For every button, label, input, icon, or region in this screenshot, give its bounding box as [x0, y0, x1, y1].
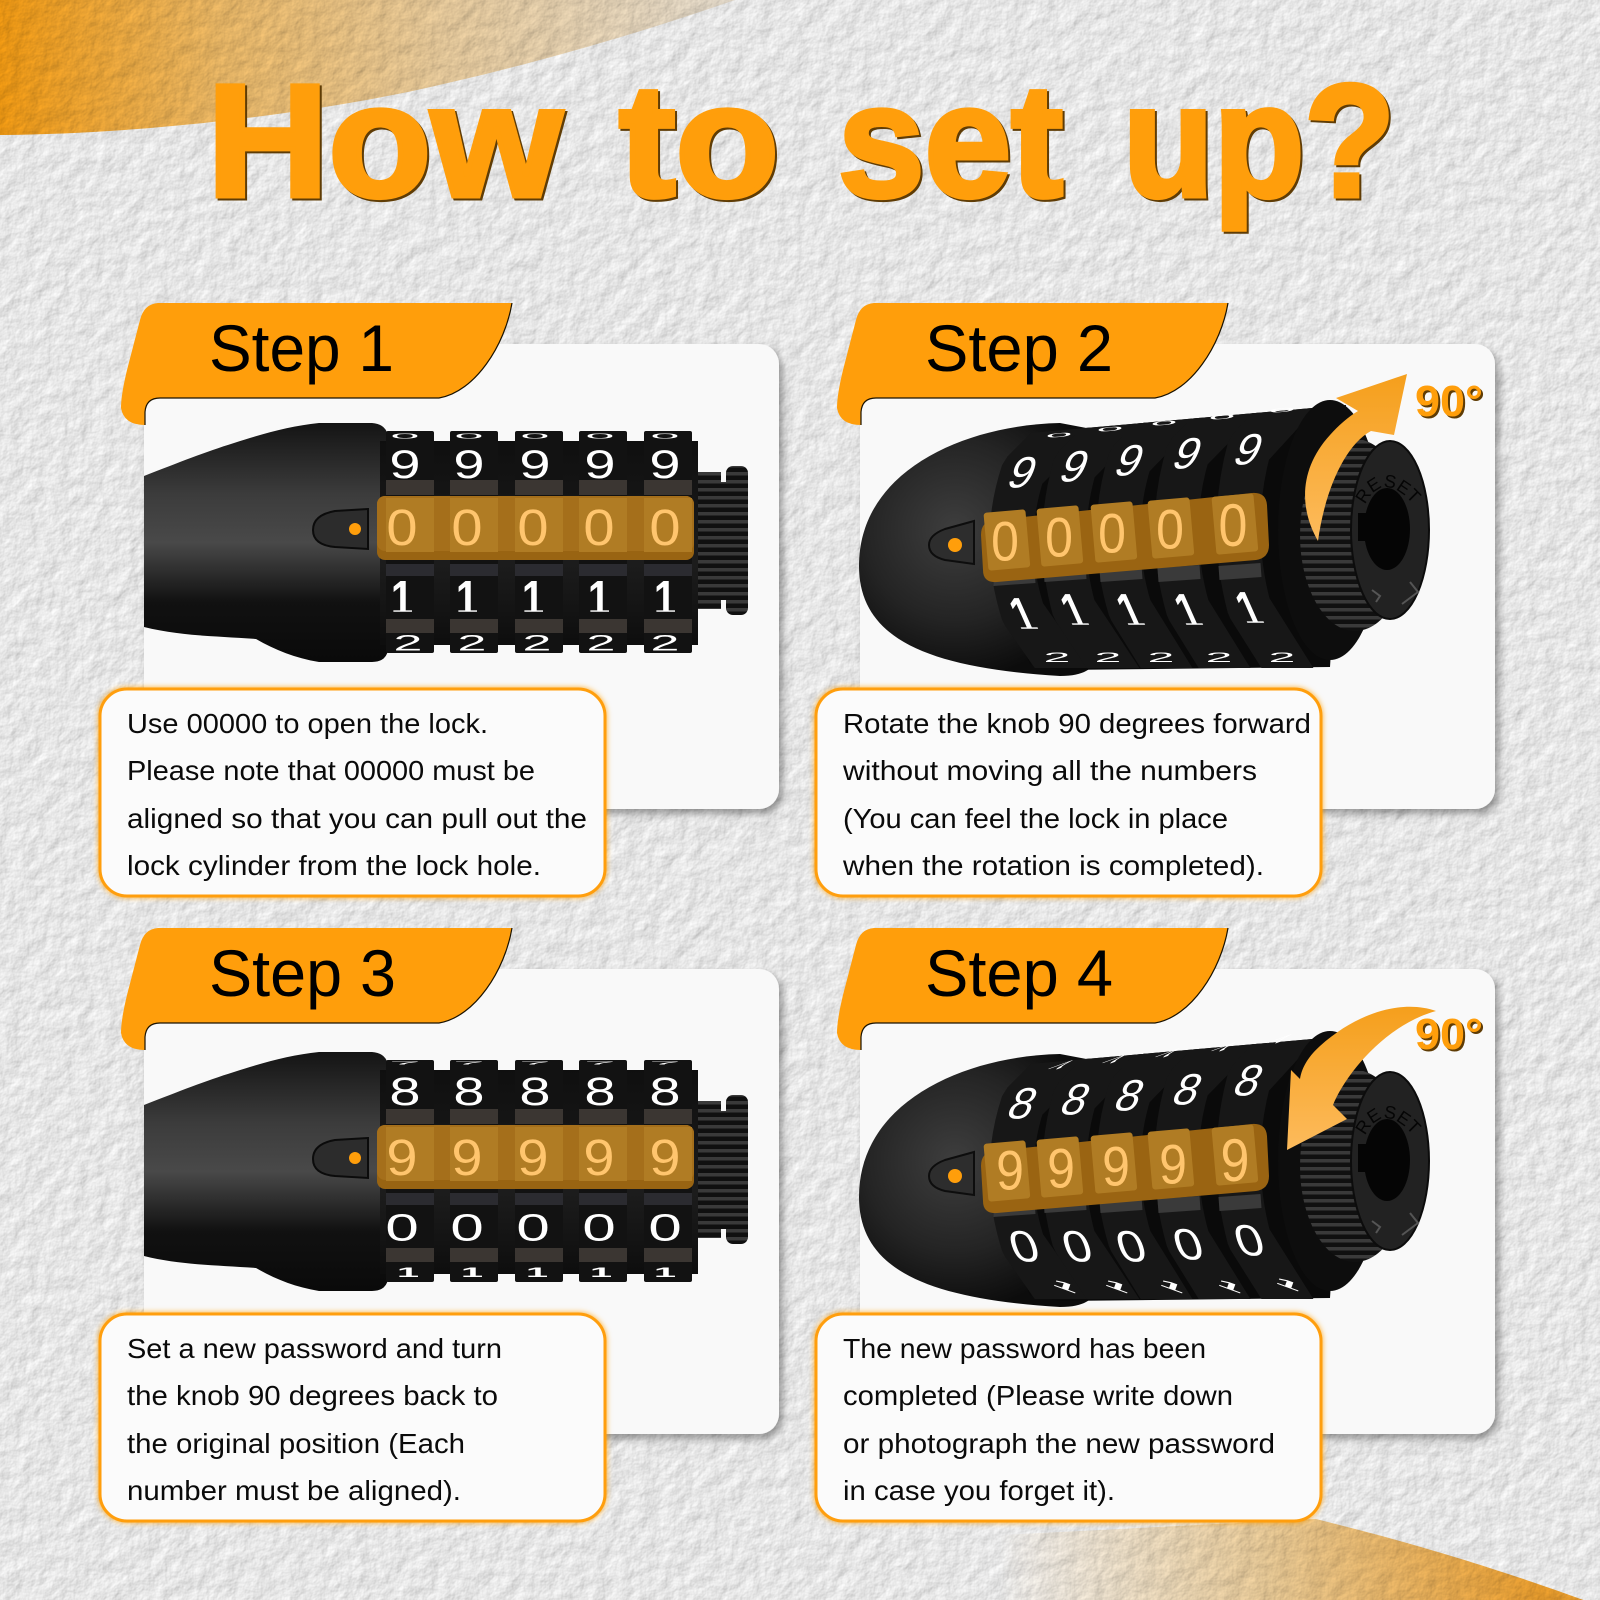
step 4 lock illustration: 7	[1264, 1032, 1296, 1048]
title: to	[621, 53, 781, 232]
step 2 lock illustration: 0	[1045, 431, 1073, 439]
step 1 lock illustration: 9	[389, 443, 421, 487]
step 2 callout	[816, 689, 1321, 896]
step 2 callout: without moving all the numbers	[842, 755, 1257, 786]
panel: step 1	[100, 303, 779, 896]
step 1 lock illustration: 1	[522, 570, 544, 627]
step 2 lock illustration: 1	[1052, 583, 1097, 639]
step 2 lock illustration: 9	[1001, 448, 1045, 497]
step 4 lock illustration	[859, 1031, 1430, 1307]
step 1 lock illustration: 0	[455, 432, 483, 440]
step 2 lock illustration: 2	[1269, 650, 1295, 665]
panel: step 2	[810, 302, 1504, 902]
step 2 lock illustration: 0	[1150, 419, 1178, 427]
step 4 lock illustration: 7	[1208, 1040, 1240, 1056]
title: How	[207, 51, 563, 230]
step 1 lock illustration: 0	[583, 499, 615, 556]
step 2 lock illustration: 2	[1206, 650, 1232, 665]
step 4 lock illustration: 8	[1001, 1079, 1045, 1128]
step 2 lock illustration: RESET	[1356, 475, 1422, 504]
step 2 lock illustration: 9	[1166, 429, 1210, 478]
step 4 lock illustration: 1	[1215, 1277, 1244, 1296]
step 2 lock illustration: 1	[1227, 581, 1272, 637]
step 4 lock illustration: 0	[1166, 1220, 1210, 1269]
step 2 lock illustration: 0	[1096, 425, 1124, 433]
step 4 callout: in case you forget it).	[843, 1475, 1115, 1506]
90 degree label: 90°	[1417, 1012, 1485, 1061]
step 1 callout: Please note that 00000 must be	[127, 755, 535, 786]
step 1 lock illustration: 2	[523, 631, 551, 656]
step 2 lock illustration: 0	[1045, 507, 1073, 569]
step 3 lock illustration: 1	[397, 1265, 419, 1280]
step 4 tab	[837, 928, 1228, 1050]
step 3 lock illustration: 7	[649, 1060, 681, 1066]
step 3 lock illustration: 8	[649, 1070, 681, 1114]
step 2 lock illustration: 0	[1219, 491, 1247, 559]
step 2 lock illustration: 2	[1044, 650, 1070, 665]
step 3 lock illustration: 1	[654, 1265, 676, 1280]
step 1 lock illustration: 0	[649, 499, 681, 556]
step 2 tab: Step 2	[925, 311, 1113, 385]
step 3 lock illustration: 8	[453, 1070, 485, 1114]
panel: step 3	[100, 928, 779, 1521]
step 2 tab	[837, 303, 1228, 425]
step 4 lock illustration: 1	[1157, 1277, 1186, 1296]
step 3 lock illustration: 7	[389, 1060, 421, 1066]
step 3 lock illustration: 1	[461, 1265, 483, 1280]
step 2 lock illustration: 0	[991, 511, 1019, 573]
step 3 lock illustration: 9	[451, 1129, 483, 1186]
orange swoosh top-left	[0, 0, 735, 135]
step 2 lock illustration: 1	[1108, 583, 1153, 639]
title: to	[619, 51, 779, 230]
step 3 callout: the original position (Each	[127, 1428, 465, 1459]
step 4 lock illustration: 7	[1045, 1058, 1077, 1074]
step 4 lock illustration: 0	[1227, 1216, 1271, 1265]
step 3 lock illustration: 7	[584, 1060, 616, 1066]
step 3 lock illustration: 1	[526, 1265, 548, 1280]
step 3 tab	[121, 928, 512, 1050]
step 3 card	[144, 969, 779, 1434]
step 4 callout: The new password has been	[843, 1333, 1206, 1364]
step 3 lock illustration: 7	[519, 1060, 551, 1066]
step 1 lock illustration: 9	[519, 443, 551, 487]
step 3 lock illustration: 9	[583, 1129, 615, 1186]
step 1 callout: aligned so that you can pull out the	[127, 803, 587, 834]
step 4 lock illustration: 8	[1054, 1075, 1098, 1124]
step 2 card	[860, 344, 1495, 809]
step 2 lock illustration: 9	[1108, 436, 1152, 485]
90 degree label: 90°	[1415, 377, 1483, 426]
step 2 lock illustration: 1	[1166, 583, 1211, 639]
step 4 lock illustration: 0	[1002, 1222, 1046, 1271]
step 1 lock illustration: 0	[586, 432, 614, 440]
step 3 lock illustration	[144, 1052, 748, 1291]
step 3 lock illustration: 0	[385, 1206, 419, 1249]
step 2 lock illustration: 1	[1001, 587, 1046, 643]
step 1 lock illustration: 0	[517, 499, 549, 556]
step 2 lock illustration: 9	[1053, 442, 1097, 491]
step 3 lock illustration: 0	[450, 1206, 484, 1249]
step 1 tab	[121, 303, 512, 425]
step 2 lock illustration: 2	[1095, 650, 1121, 665]
step 4 lock illustration: 1	[1273, 1275, 1302, 1294]
step 1 lock illustration: 2	[651, 631, 679, 656]
step 1 lock illustration: 1	[391, 570, 413, 627]
step 3 lock illustration: 0	[582, 1206, 616, 1249]
step 3 lock illustration: 0	[648, 1206, 682, 1249]
step 4 lock illustration: 9	[1047, 1138, 1075, 1200]
step 1 lock illustration: 0	[386, 499, 418, 556]
step 1 tab: Step 1	[209, 311, 394, 385]
step 3 lock illustration: 8	[584, 1070, 616, 1114]
step 3 lock illustration: 8	[389, 1070, 421, 1114]
90 degree label: 90°	[1415, 1010, 1483, 1059]
step 1 lock illustration	[144, 423, 748, 662]
step 2 lock illustration: 9	[1227, 425, 1271, 474]
step 4 lock illustration: 0	[1055, 1222, 1099, 1271]
title	[207, 51, 1397, 232]
step 3 lock illustration: 0	[516, 1206, 550, 1249]
title: How	[209, 53, 565, 232]
orange swoosh bottom-right	[1000, 1519, 1600, 1600]
step 1 lock illustration: 2	[587, 631, 615, 656]
step 4 tab: Step 4	[925, 936, 1113, 1010]
step 1 lock illustration: 1	[654, 570, 676, 627]
title: up?	[1125, 53, 1397, 232]
step 1 lock illustration: 2	[458, 631, 486, 656]
step 4 lock illustration: 9	[1221, 1126, 1249, 1194]
step 1 lock illustration: 9	[584, 443, 616, 487]
step 2 lock illustration: 0	[1268, 406, 1296, 414]
90 degree label: 90°	[1417, 379, 1485, 428]
title: set	[840, 53, 1065, 232]
step 3 lock illustration: 8	[519, 1070, 551, 1114]
step 3 lock illustration: 7	[453, 1060, 485, 1066]
step 4 lock illustration: 0	[1109, 1222, 1153, 1271]
step 2 callout: when the rotation is completed).	[842, 850, 1264, 881]
step 4 lock illustration: 9	[1102, 1136, 1130, 1198]
step 4 callout: or photograph the new password	[843, 1428, 1275, 1459]
step 1 lock illustration: 0	[391, 432, 419, 440]
step 3 lock illustration: 9	[386, 1129, 418, 1186]
panel: step 4	[810, 928, 1504, 1528]
step 3 lock illustration: 1	[590, 1265, 612, 1280]
step 2 callout: Rotate the knob 90 degrees forward	[843, 708, 1311, 739]
step 3 lock illustration: 9	[649, 1129, 681, 1186]
step 4 lock illustration: 8	[1166, 1065, 1210, 1114]
step 4 lock illustration: 7	[1099, 1052, 1131, 1068]
step 1 lock illustration: 9	[453, 443, 485, 487]
step 1 lock illustration: 2	[394, 631, 422, 656]
step 1 callout: lock cylinder from the lock hole.	[127, 850, 541, 881]
step 1 lock illustration: 9	[649, 443, 681, 487]
step 4 lock illustration: 8	[1108, 1071, 1152, 1120]
title: up?	[1123, 51, 1395, 230]
step 1 callout: Use 00000 to open the lock.	[127, 708, 488, 739]
step 3 callout: the knob 90 degrees back to	[127, 1380, 498, 1411]
step 3 callout	[100, 1314, 605, 1521]
step 3 tab: Step 3	[209, 936, 396, 1010]
step 4 lock illustration: 1	[1050, 1277, 1079, 1296]
step 4 lock illustration: 9	[1159, 1134, 1187, 1196]
step 4 lock illustration: 7	[1152, 1046, 1184, 1062]
step 1 lock illustration: 0	[651, 432, 679, 440]
step 4 callout	[816, 1314, 1321, 1521]
step 1 lock illustration: 0	[451, 499, 483, 556]
step 2 lock illustration: 0	[1156, 499, 1184, 561]
step 3 callout: number must be aligned).	[127, 1475, 461, 1506]
step 1 callout	[100, 689, 605, 896]
step 1 lock illustration: 0	[521, 432, 549, 440]
step 2 lock illustration: 0	[1098, 503, 1126, 565]
arrow: rotate back	[1287, 1007, 1436, 1150]
step 4 lock illustration: 1	[1102, 1277, 1131, 1296]
step 4 card	[860, 969, 1495, 1434]
step 4 callout: completed (Please write down	[843, 1380, 1233, 1411]
title: set	[838, 51, 1063, 230]
step 2 callout: (You can feel the lock in place	[843, 803, 1228, 834]
step 3 lock illustration: 9	[517, 1129, 549, 1186]
step 2 lock illustration: 2	[1148, 650, 1174, 665]
step 1 lock illustration: 1	[588, 570, 610, 627]
step 4 lock illustration: 8	[1227, 1056, 1271, 1105]
step 4 lock illustration: RESET	[1356, 1106, 1422, 1134]
step 2 lock illustration	[859, 400, 1430, 676]
step 2 lock illustration: 0	[1208, 413, 1236, 421]
arrow: rotate forward	[1305, 374, 1407, 541]
step 3 callout: Set a new password and turn	[127, 1333, 502, 1364]
step 4 lock illustration: 9	[996, 1140, 1024, 1202]
step 1 lock illustration: 1	[456, 570, 478, 627]
step 1 card	[144, 344, 779, 809]
